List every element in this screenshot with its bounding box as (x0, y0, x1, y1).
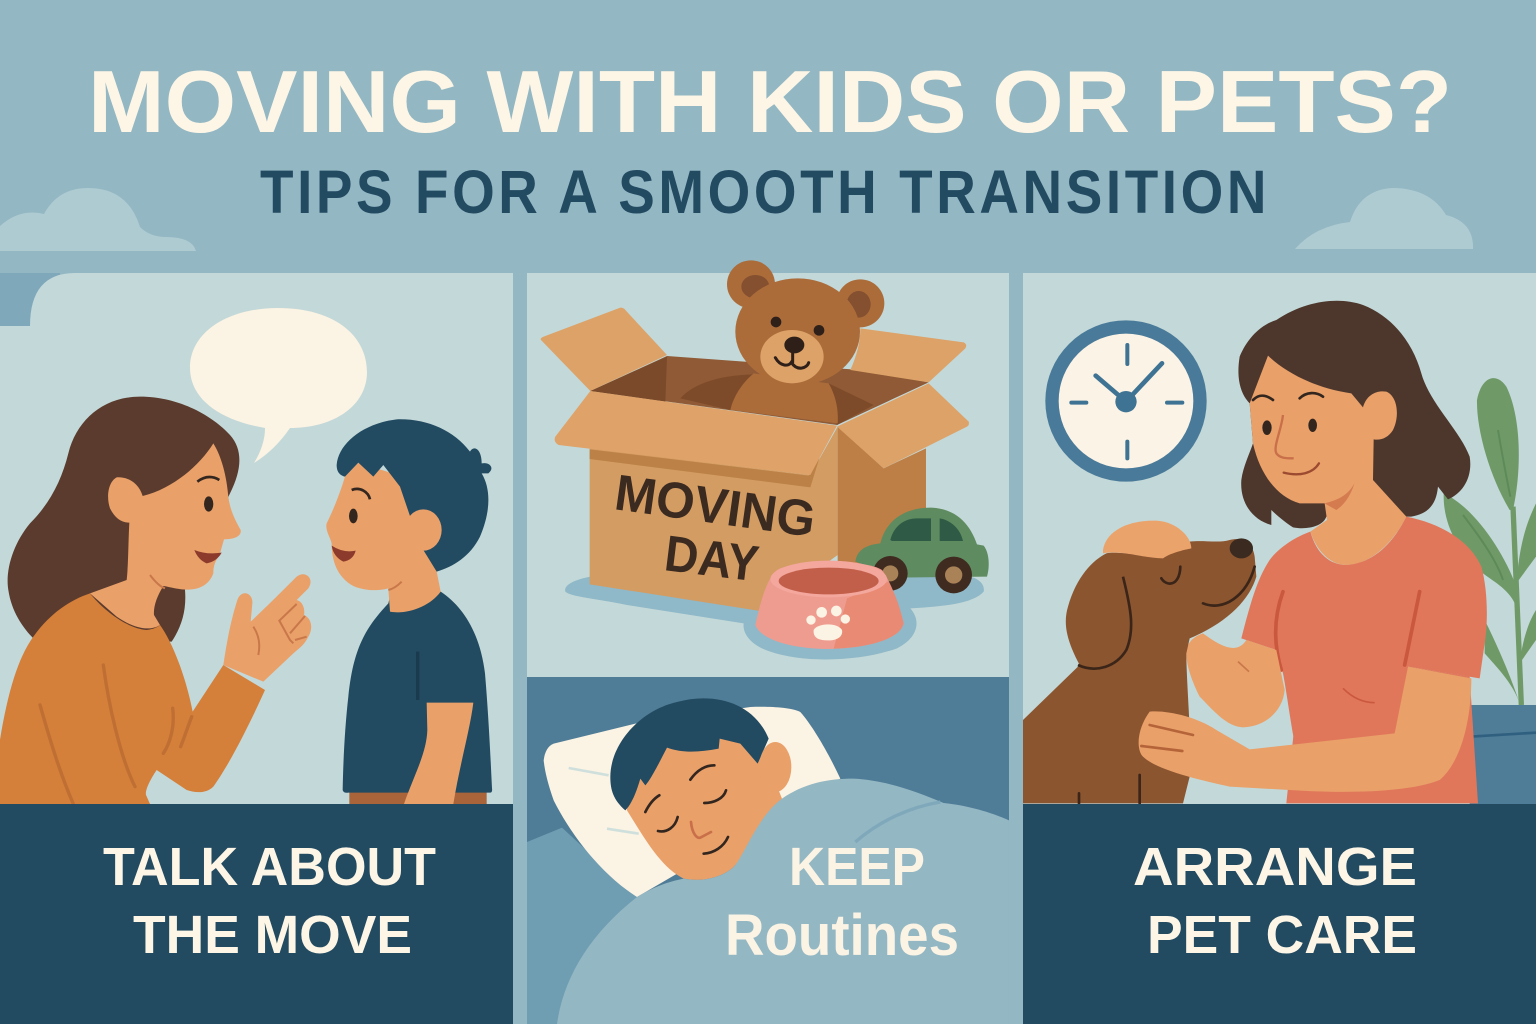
caption: talk about the move: THE MOVE (133, 905, 412, 965)
panel: talk about the move (0, 273, 513, 804)
toy car (855, 508, 989, 593)
box label: MOVING (611, 463, 819, 548)
sofa (1470, 705, 1536, 805)
caption: keep routines: KEEP (789, 837, 925, 897)
mother (0, 397, 311, 804)
subtitle: TIPS FOR A SMOOTH TRANSITION (260, 158, 1270, 226)
background hill (0, 273, 60, 326)
dog (1023, 521, 1256, 803)
caption bar: pet care (1023, 804, 1536, 1024)
arm and hand on dog (1139, 667, 1471, 792)
caption: talk about the move (103, 837, 436, 965)
box, bear and toys (541, 260, 989, 659)
caption: arrange pet care (1133, 837, 1417, 965)
box label (611, 463, 819, 592)
clock (1045, 320, 1207, 482)
box label: DAY (662, 524, 762, 592)
cloud left (0, 188, 196, 251)
sleeping child (527, 698, 1009, 1024)
caption: arrange pet care: PET CARE (1147, 905, 1417, 965)
caption bar: talk (0, 804, 513, 1024)
pet bowl (755, 561, 904, 649)
panel: moving day box (527, 260, 1009, 677)
caption: keep routines: Routines (725, 903, 959, 968)
panel: arrange pet care (1023, 273, 1536, 805)
plant (1444, 378, 1536, 705)
speech bubble (190, 308, 367, 463)
teddy bear (727, 260, 884, 423)
caption: talk about the move: TALK ABOUT (103, 837, 436, 897)
title: MOVING WITH KIDS OR PETS? (88, 52, 1452, 151)
cloud right (1295, 188, 1473, 249)
panel: keep routines (527, 677, 1009, 1024)
woman (1186, 301, 1487, 803)
caption: keep routines (725, 837, 959, 968)
caption: arrange pet care: ARRANGE (1133, 837, 1417, 897)
boy (326, 419, 492, 804)
